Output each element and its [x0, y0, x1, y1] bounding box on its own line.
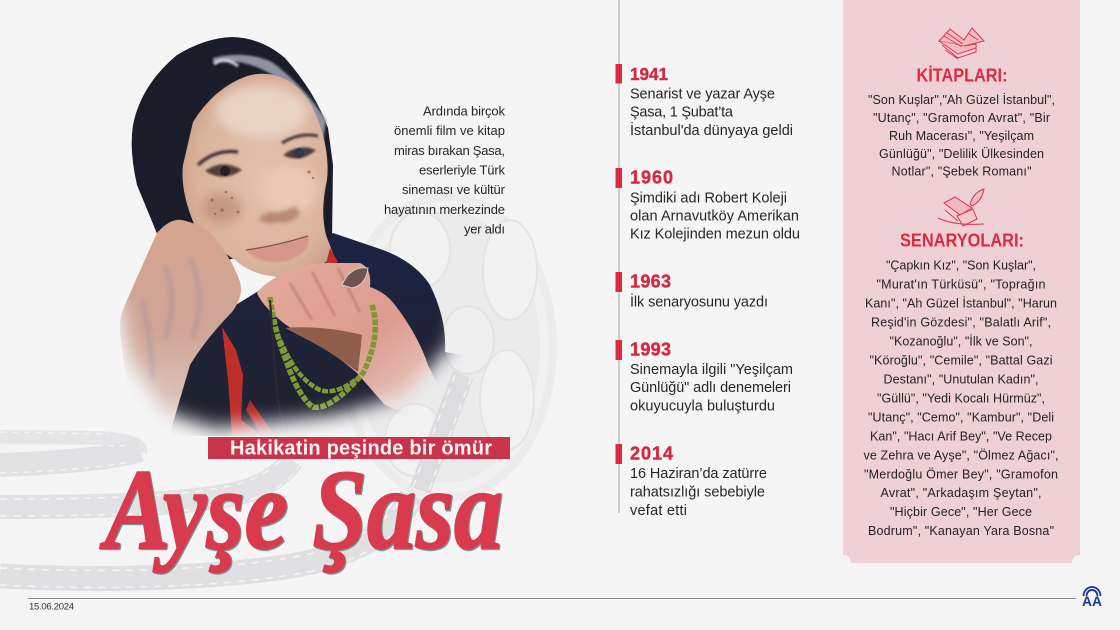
timeline entry 1960 — [616, 168, 800, 243]
books list: Notlar", "Şebek Romanı" — [892, 165, 1032, 179]
intro text: hayatının merkezinde — [384, 202, 505, 217]
fist veins — [142, 258, 200, 380]
green prayer beads — [270, 297, 375, 436]
date: 15.06.2024 — [29, 602, 74, 612]
freckles — [210, 170, 314, 215]
screenplays list: Destanı", "Unutulan Kadın", — [884, 372, 1038, 386]
screenplays list: "Çapkın Kız", "Son Kuşlar", — [886, 258, 1036, 272]
screenplays list: "Hiçbir Gece", "Her Gece — [890, 505, 1032, 519]
screenplays list: Kanı", "Ah Güzel İstanbul", "Harun — [865, 296, 1057, 310]
headscarf — [132, 37, 333, 265]
books list: Günlüğü", "Delilik Ülkesinden — [879, 147, 1044, 161]
intro text: eserleriyle Türk — [419, 162, 506, 178]
books list: Ruh Macerası", "Yeşilçam — [889, 129, 1034, 143]
heading: screenplays: SENARYOLARI: — [900, 231, 1024, 251]
screenplays list: "Murat'ın Türküsü", "Toprağın — [876, 277, 1046, 291]
intro text: sineması ve kültür — [402, 182, 506, 197]
subtitle banner: Hakikatin peşinde bir ömür — [230, 438, 492, 460]
cheek shading — [202, 193, 242, 223]
nose — [258, 206, 300, 223]
books list: "Son Kuşlar","Ah Güzel İstanbul", — [868, 93, 1055, 107]
timeline entry 1963: İlk senaryosunu yazdı — [630, 293, 768, 311]
intro text: önemli film ve kitap — [394, 123, 505, 138]
timeline entry 2014 — [616, 444, 767, 519]
right eye — [282, 135, 318, 159]
timeline entry 1993: Günlüğü" adlı denemeleri — [630, 380, 791, 396]
grey hair — [213, 55, 326, 150]
forehead highlight — [216, 86, 308, 138]
intro text: miras bırakan Şasa, — [394, 143, 505, 158]
screenplays list: "Güllü", "Yedi Kocalı Hürmüz", — [877, 391, 1045, 405]
icon: AA agency logo: AA — [1082, 593, 1102, 609]
timeline entry 1941: 1941 — [630, 64, 668, 84]
icon: open book stack — [939, 28, 984, 59]
timeline entry 1963: 1963 — [630, 272, 671, 292]
screenplays list: Avrat", "Arkadaşım Şeytan", — [880, 486, 1042, 500]
screenplays list: "Merdoğlu Ömer Bey", "Gramofon — [864, 467, 1058, 481]
screenplays list: ve Zehra ve Ayşe", "Ölmez Ağacı", — [864, 448, 1058, 462]
left eye — [198, 152, 242, 177]
timeline axis — [618, 0, 620, 513]
timeline entry 1960: 1960 — [630, 168, 673, 188]
screenplays list: "Köroğlu", "Cemile", "Battal Gazi — [870, 353, 1052, 367]
screenplays list: "Utanç", "Cemo", "Kambur", "Deli — [868, 410, 1054, 424]
timeline entry 1993: okuyucuyla buluşturdu — [630, 399, 775, 415]
lower face highlight — [262, 166, 318, 214]
icon: book and quill — [938, 189, 984, 226]
red collar — [326, 248, 338, 264]
timeline entry 1993: 1993 — [630, 340, 671, 360]
books list — [868, 93, 1055, 179]
heading: books: KİTAPLARI: — [916, 66, 1008, 86]
knuckle wrinkles — [285, 327, 362, 372]
timeline entry 2014: rahatsızlığı sebebiyle — [630, 485, 765, 501]
portrait of Ayşe Şasa — [120, 37, 470, 440]
timeline entry 2014: vefat etti — [630, 503, 687, 519]
face — [182, 74, 334, 277]
timeline entry 1941 — [616, 64, 793, 139]
ring — [342, 268, 368, 288]
timeline entry 1963 — [616, 272, 768, 311]
timeline entry 2014: 16 Haziran’da zatürre — [630, 466, 767, 482]
lips — [246, 236, 309, 262]
film strips background — [0, 375, 471, 587]
timeline entry 1960: Şimdiki adı Robert Koleji — [630, 191, 787, 207]
timeline entry 1960: olan Arnavutköy Amerikan — [630, 209, 799, 225]
screenplays list: Reşid'in Gözdesi", "Balatlı Arif", — [871, 315, 1051, 329]
timeline entry 1941: İstanbul'da dünyaya geldi — [630, 121, 793, 139]
books list: "Utanç", "Gramofon Avrat", "Bir — [873, 111, 1050, 125]
body dark clothing — [165, 233, 470, 440]
timeline entry 1993: Sinemayla ilgili "Yeşilçam — [630, 362, 793, 378]
timeline entry 1993 — [616, 340, 793, 415]
timeline entry 1960: Kız Kolejinden mezun oldu — [630, 227, 800, 243]
timeline entry 1941: Şasa, 1 Şubat’ta — [630, 105, 734, 121]
film reel background — [337, 192, 557, 502]
timeline entry 1941: Senarist ve yazar Ayşe — [630, 86, 775, 102]
right hand — [257, 263, 445, 411]
left fist and arm — [120, 220, 241, 440]
intro text: Ardında birçok — [423, 104, 506, 118]
intro text: yer aldı — [464, 222, 505, 236]
screenplays list — [864, 258, 1058, 538]
main title: Ayşe Şasa — [100, 446, 503, 573]
screenplays list: Bodrum", "Kanayan Yara Bosna" — [868, 524, 1054, 538]
screenplays list: "Kozanoğlu", "İlk ve Son", — [890, 334, 1032, 348]
red scarf — [222, 327, 262, 436]
timeline entry 2014: 2014 — [630, 444, 673, 464]
intro text — [384, 104, 506, 236]
footer rule — [28, 598, 1076, 600]
screenplays list: Kan", "Hacı Arif Bey", "Ve Recep — [870, 429, 1052, 443]
panel: books and screenplays — [843, 0, 1080, 563]
